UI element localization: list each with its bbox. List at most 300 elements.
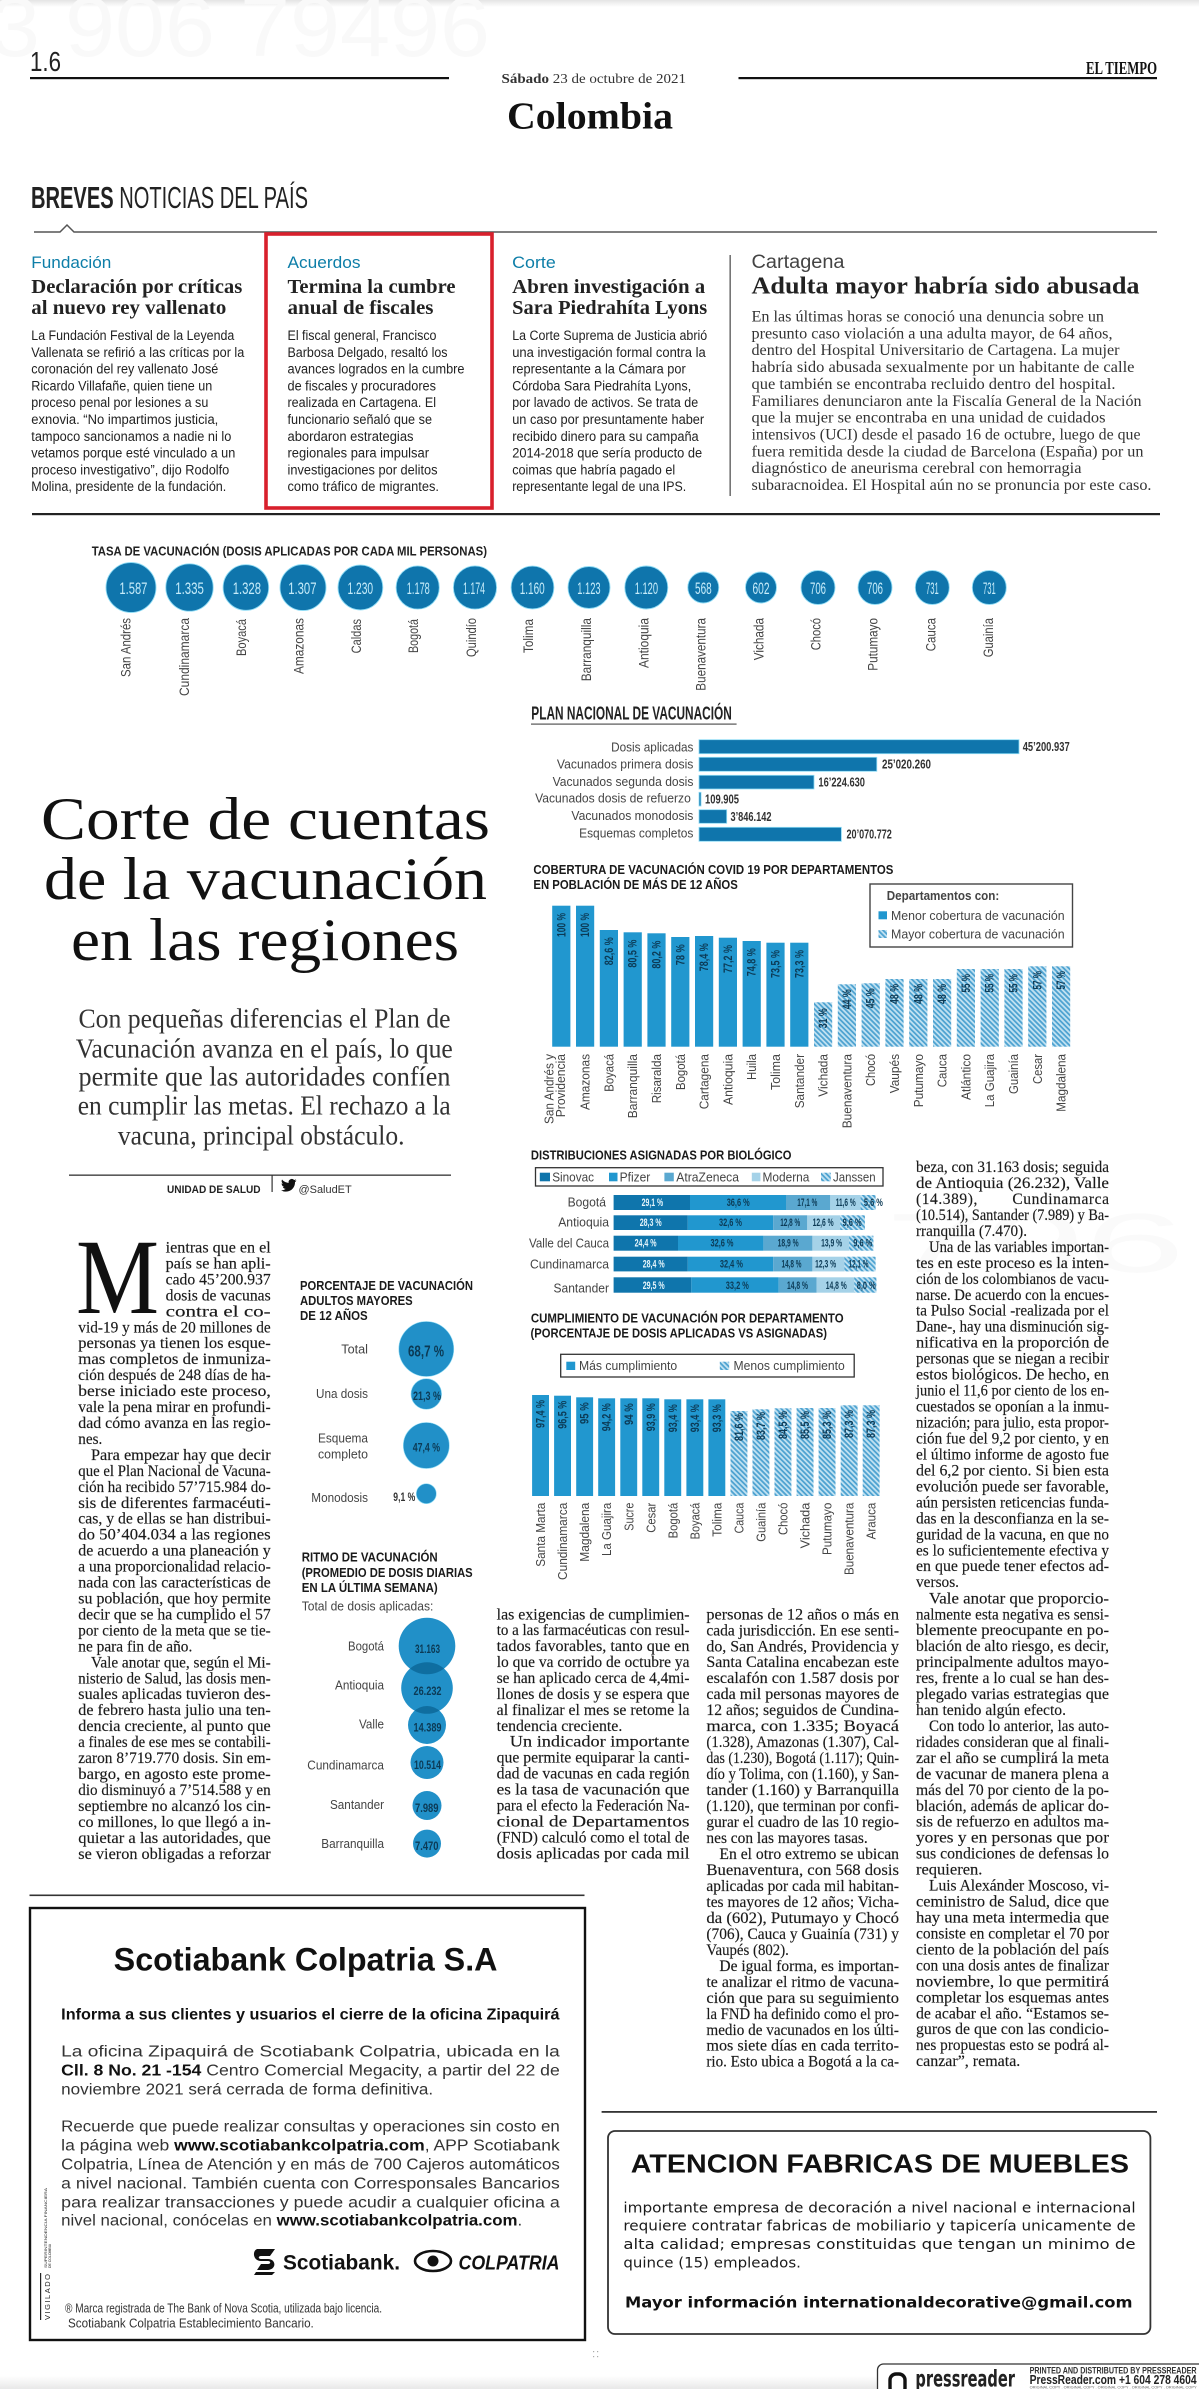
deck (76, 1004, 453, 1151)
legend: Menos cumplimiento (734, 1358, 845, 1373)
values: 31.163 (415, 1642, 440, 1656)
article column 4: aún persisten reticencias funda- (916, 1494, 1109, 1511)
bar labels: Esquemas completos (579, 825, 694, 840)
article column 3: escalafón con 1.587 dosis por (706, 1670, 900, 1687)
brief: Fundación: vetamos porque esté vinculado a un (31, 446, 235, 461)
bar labels: Vacunados segunda dosis (553, 774, 694, 789)
article column 4: de acabar el año. “Estamos se- (916, 2005, 1109, 2022)
brief: Cartagena: que la mujer se encontraba en una unidad de cuidados (752, 410, 1106, 427)
department labels: Arauca (864, 1502, 879, 1539)
bubble chart: porcentaje de vacunación: DE 12 AÑOS (300, 1308, 368, 1323)
brief: Fundación: La Fundación Festival de la Leyenda (31, 328, 235, 343)
segment values: 36,6 % (727, 1197, 750, 1209)
bubble values: 731 (926, 579, 939, 598)
ad paragraph 2: Colpatria, Línea de Atención y en más de 700 Cajeros automáticos (61, 2156, 560, 2173)
solid bars (532, 1395, 725, 1496)
brief: Cartagena: Cartagena (752, 252, 845, 273)
bubble chart: ritmo de vacunación: (PROMEDIO DE DOSIS DIARIAS (302, 1565, 473, 1580)
article column 2: que permite equiparar la canti- (497, 1750, 690, 1767)
advertisement: Scotiabank Colpatria (30, 1908, 585, 2340)
labels: Barranquilla (321, 1836, 385, 1851)
bubbles (106, 562, 1006, 612)
bubble chart: ritmo de vacunación: EN LA ÚLTIMA SEMANA) (302, 1580, 438, 1595)
newspaper logo: EL TIEMPO (1086, 58, 1157, 78)
ad body: requiere contratar fabricas de mobiliario y tapicería unicamente de (623, 2219, 1136, 2235)
solid bars (552, 906, 808, 1047)
article column 1: ne para fin de año. (78, 1638, 192, 1655)
article column 1: dio disminuyó a 7’514.588 y en (78, 1782, 271, 1799)
brief: Corte: Corte (512, 253, 556, 272)
article column 1: decir que se ha cumplido el 57 (78, 1606, 271, 1624)
segment values: 28,3 % (640, 1217, 662, 1229)
article column 4: narse. De acuerdo con la encues- (916, 1287, 1109, 1304)
bubble chart: tasa de vacunación: 731 (983, 579, 996, 598)
labels: Una dosis (316, 1386, 368, 1401)
bar labels: Dosis aplicadas (611, 740, 694, 755)
brief: Fundación: Vallenata se refirió a las críticas por la (31, 345, 245, 360)
article column 3: (1.328), Amazonas (1.307), Cal- (706, 1734, 899, 1751)
ad paragraph 2: para realizar transacciones y puede acudir a cualquier oficina a (61, 2194, 560, 2211)
ad body: importante empresa de decoración a nivel nacional e internacional (623, 2200, 1136, 2216)
brief: Cartagena: presunto caso violación a una adulta mayor, de 64 años, (752, 325, 1112, 342)
rotated department labels: Vichada (751, 618, 766, 660)
segment values: 24,4 % (635, 1238, 657, 1250)
article column 4: plegado varias estrategias que (916, 1686, 1109, 1703)
article column 4: requieren. (916, 1862, 982, 1879)
segment values: 11,6 % (836, 1197, 856, 1209)
article column 2: las exigencias de cumplimien- (497, 1606, 690, 1623)
legend: AtraZeneca (676, 1169, 740, 1184)
article column 4: cuestados se oponían a la inmu- (916, 1399, 1109, 1416)
horizontal bars (699, 740, 1019, 841)
ad paragraph 2: Recuerde que puede realizar consultas y operaciones sin costo en (61, 2119, 560, 2136)
brief: Corte: una investigación formal contra la (512, 345, 706, 360)
department labels: Vichada (816, 1053, 831, 1097)
article column 4: sis de refuerzo en adultos ma- (916, 1814, 1109, 1831)
article column 1: septiembre no alcanzó los cin- (78, 1798, 271, 1815)
article column 3: En el otro extremo se ubican (719, 1846, 899, 1863)
ad paragraph 2: la página web www.scotiabankcolpatria.com , APP Scotiabank (61, 2138, 560, 2155)
bubble values: 1.587 (119, 579, 147, 598)
article column 1: ción ha recibido 57’715.984 do- (78, 1479, 271, 1496)
article column 3: do, San Andrés, Providencia y (706, 1638, 899, 1655)
labels (311, 1342, 369, 1505)
brief: Acuerdos: Barbosa Delgado, resaltó los (288, 345, 448, 360)
bar values: 57 % (1054, 971, 1068, 990)
bar values: 93,3 % (710, 1404, 724, 1432)
department labels: Tolima (709, 1502, 724, 1537)
labels: Cundinamarca (307, 1758, 385, 1772)
article column 1: su población, que hoy permite (78, 1590, 271, 1608)
article column 4: guridad de la vacuna, en que no (916, 1526, 1109, 1543)
article column 2 (497, 1606, 690, 1862)
bar values: 45 % (864, 988, 878, 1008)
bar values: 85,3 % (820, 1411, 834, 1439)
brief: Corte: un caso por presuntamente haber (512, 412, 705, 427)
article column 3: Santa Catalina encabezan este (706, 1654, 899, 1671)
article column 4: Dane-, hay una disminución sig- (916, 1319, 1109, 1336)
deck: Vacunación avanza en el país, lo que (76, 1034, 453, 1064)
row labels: Antioquia (558, 1215, 610, 1230)
segment values: 8,0 % (857, 1280, 876, 1292)
article column 1: nes. (78, 1431, 102, 1448)
department labels: Cauca (935, 1053, 950, 1087)
article column 3: 12 años; seguidos de Cundina- (706, 1702, 899, 1719)
labels: Santander (330, 1797, 385, 1812)
segment values: 18,9 % (778, 1238, 799, 1250)
bubble values: 1.178 (407, 579, 430, 598)
article column 1: se vieron obligadas a reforzar (78, 1846, 272, 1863)
article column 4: (14.389), Cundinamarca (916, 1191, 1109, 1208)
chart title: PORCENTAJE DE VACUNACIÓN (300, 1278, 473, 1293)
department labels: Buenaventura (842, 1502, 857, 1575)
bar values: 20’070.772 (846, 826, 892, 842)
article column 4: tes en este proceso es la inten- (916, 1255, 1109, 1272)
article column 4: del 6,2 por ciento. Si bien esta (916, 1462, 1109, 1479)
main headline: de la vacunación (44, 846, 487, 912)
row labels: Valle del Cauca (529, 1235, 610, 1250)
department labels: Vaupés (887, 1054, 902, 1093)
brief: Fundación: Molina, presidente de la fundación. (31, 479, 226, 494)
article column 2: tados favorables, tanto que en (497, 1638, 690, 1655)
department labels: Vichada (798, 1502, 813, 1548)
bar values: 87,3 % (842, 1410, 856, 1438)
article column 4: han tenido algún efecto. (916, 1702, 1066, 1719)
article column 4: beza, con 31.163 dosis; seguida (916, 1159, 1109, 1176)
segment values: 17,1 % (797, 1197, 817, 1209)
article column 4: personas que se niegan a recibir (916, 1351, 1110, 1368)
article column 4: completar los esquemas antes (916, 1989, 1109, 2006)
article column 1: personas ya tienen los esque- (78, 1335, 271, 1352)
values: 21,3 % (413, 1389, 441, 1403)
article column 4: sus condiciones de defensas lo (916, 1846, 1109, 1863)
department labels: Cauca (732, 1502, 746, 1533)
bar values: 45’200.937 (1023, 739, 1070, 754)
legend: Janssen (833, 1169, 876, 1184)
bar values: 73,3 % (792, 950, 806, 978)
article column 4: principalmente adultos mayo- (916, 1654, 1109, 1671)
article column 3: la FND ha definido como el pro- (706, 2006, 899, 2023)
article column 1: Vale anotar que, según el Mi- (91, 1654, 271, 1671)
bar values: 81,6 % (732, 1413, 746, 1441)
segment values: 32,6 % (710, 1238, 734, 1250)
department labels: Guainía (754, 1502, 768, 1542)
segment values: 32,6 % (719, 1217, 742, 1229)
vigilado mark: VIGILADO (43, 2274, 52, 2320)
legend (536, 1168, 883, 1186)
brief: Acuerdos: Termina la cumbre (288, 276, 456, 298)
article column 4: versos. (916, 1574, 959, 1591)
chart title: PLAN NACIONAL DE VACUNACIÓN (531, 702, 732, 723)
article column 1: mas completos de inmuniza- (78, 1351, 271, 1368)
values: 9,1 % (393, 1490, 416, 1504)
article column 1 (76, 1219, 272, 1863)
department labels: Guainía (1006, 1053, 1021, 1094)
article column 3: tander (1.160) y Barranquilla (706, 1782, 899, 1799)
brief: Acuerdos: avances logrados en la cumbre (288, 362, 464, 377)
bar values: 48 % (935, 984, 949, 1004)
brief: Fundación (31, 253, 245, 494)
bar chart: plan nacional de vacunación (531, 702, 1070, 842)
article column 4: nalmente esta negativa es sensi- (916, 1606, 1109, 1623)
rotated department labels: Bogotá (406, 619, 421, 653)
brief: Cartagena: dentro del Hospital Universitario de Cartagena. La mujer (752, 342, 1120, 359)
department labels: Boyacá (601, 1053, 616, 1092)
article column 4: zar el año se cumplirá la meta (916, 1750, 1109, 1767)
bubbles (399, 1322, 454, 1504)
article column 2: cional de Departamentos (497, 1813, 690, 1830)
article column 1: suales aplicadas tuvieron des- (78, 1686, 271, 1703)
bar values: 80,5 % (626, 939, 640, 968)
bar values: 96,5 % (556, 1400, 570, 1429)
ad title: Scotiabank Colpatria S.A (114, 1942, 497, 1978)
article column 2: (FND) calculó como el total de (497, 1829, 690, 1846)
bubble values: 1.335 (175, 579, 204, 598)
bubble values: 602 (752, 579, 770, 598)
article column 1: zaron 8’719.770 dosis. Sin em- (78, 1750, 271, 1767)
article column 4: blemente preocupante en po- (916, 1622, 1109, 1639)
article column 4: Vale anotar que proporcio- (929, 1590, 1109, 1607)
article column 4: consiste en completar el 70 por (916, 1926, 1110, 1942)
article column 4: guros de que con las condicio- (916, 2021, 1109, 2038)
text: 796 (885, 1196, 1185, 1290)
article column 4 (915, 1159, 1110, 2070)
department labels: Buenaventura (839, 1053, 854, 1128)
ad paragraph 1: La oficina Zipaquirá de Scotiabank Colpatria, ubicada en la (61, 2044, 560, 2061)
bar values: 94,2 % (600, 1403, 614, 1431)
article column 2: para el efecto la Federación Na- (497, 1798, 690, 1814)
department labels: Cundinamarca (555, 1502, 570, 1580)
segment values (635, 1197, 883, 1292)
department labels: San Andrés y (542, 1054, 556, 1124)
department labels: Putumayo (820, 1503, 835, 1555)
bar values: 87,3 % (864, 1410, 878, 1438)
department labels: Boyacá (687, 1502, 702, 1539)
brief: Fundación: tampoco sancionamos a nadie ni lo (31, 429, 231, 444)
bubble chart: ritmo de vacunación (302, 1550, 473, 1858)
values: 10.514 (414, 1758, 441, 1772)
advertisement: Scotiabank Colpatria: COLPATRIA (458, 2252, 560, 2274)
striped bars (730, 1405, 880, 1496)
legend: Moderna (762, 1169, 810, 1184)
labels: Valle (359, 1717, 384, 1732)
brief: Acuerdos: abordaron estrategias (288, 429, 414, 444)
section title: Colombia (507, 96, 673, 138)
values: 7.470 (415, 1839, 439, 1853)
bar values: 78,4 % (697, 943, 711, 971)
article column 1: país se han apli- (166, 1256, 271, 1272)
article column 2: dosis aplicadas por cada mil (497, 1845, 690, 1862)
article column 4: en que puede tener efectos ad- (916, 1558, 1109, 1575)
article column 4: hay una meta intermedia que (916, 1910, 1109, 1926)
rotated department labels: Buenaventura (694, 618, 709, 691)
brief: Fundación: al nuevo rey vallenato (31, 297, 226, 319)
bar values: 97,4 % (534, 1400, 548, 1428)
article column 1: vid-19 y más de 20 millones de (78, 1319, 271, 1336)
article column 2: llones de dosis y se espera que (497, 1686, 690, 1703)
vigilado mark: SUPERINTENDENCIA FINANCIERA (44, 2187, 48, 2268)
article column 3: mos siete días en cada territo- (706, 2038, 899, 2055)
brief: Corte (512, 253, 707, 494)
article column 3: marca, con 1.335; Boyacá (706, 1718, 899, 1735)
brief: Acuerdos: Acuerdos (288, 253, 360, 272)
values (414, 1642, 442, 1853)
article column 1: berse iniciado este proceso, (78, 1383, 271, 1400)
bubble values: 706 (867, 579, 883, 598)
segment values: 32,4 % (720, 1259, 743, 1271)
ad subtitle: Informa a sus clientes y usuarios el cierre de la oficina Zipaquirá (61, 2006, 560, 2023)
bar values: 48 % (888, 984, 902, 1004)
department labels: Barranquilla (625, 1053, 640, 1118)
ad body: alta calidad; empresas constituidas que tengan un minimo de (623, 2237, 1136, 2253)
bubble values: 568 (695, 579, 712, 598)
breves heading: BREVES NOTICIAS DEL PAÍS (31, 180, 308, 215)
article column 1: do 50’404.034 a las regiones (78, 1527, 271, 1544)
bar values: 84,5 % (776, 1411, 790, 1439)
brief: Corte: representante legal de una IPS. (512, 479, 686, 494)
legend: Sinovac (552, 1169, 594, 1184)
brief: Acuerdos: como tráfico de migrantes. (288, 479, 439, 494)
article column 4: con una dosis antes de finalizar (916, 1957, 1110, 1974)
article column 2: tendencia creciente. (497, 1718, 622, 1735)
article column 4: noviembre, lo que permitirá (916, 1973, 1109, 1990)
labels: Bogotá (348, 1639, 385, 1654)
rotated department labels: Tolima (521, 619, 536, 653)
main headline: en las regiones (71, 907, 459, 973)
bar values: 93,9 % (644, 1403, 658, 1431)
department labels: Tolima (768, 1053, 783, 1090)
red highlight box (266, 234, 492, 508)
date: Sábado 23 de octubre de 2021 (502, 72, 686, 87)
vigilado mark (40, 2187, 52, 2320)
brief: Corte: La Corte Suprema de Justicia abrió (512, 328, 707, 343)
brief: Corte: Sara Piedrahíta Lyons (512, 297, 707, 319)
bar values: 80,2 % (650, 940, 664, 969)
legend (561, 1354, 854, 1377)
chart title: CUMPLIMIENTO DE VACUNACIÓN POR DEPARTAMENTO (531, 1310, 844, 1325)
legend (870, 884, 1072, 947)
department labels: Amazonas (578, 1054, 593, 1110)
bar values: 83,7 % (754, 1412, 768, 1440)
department labels: Risaralda (649, 1053, 664, 1103)
article column 3: rio. Esto ubica a Bogotá a la ca- (706, 2054, 899, 2071)
article column 4: estos biológicos. De hecho, en (916, 1367, 1109, 1384)
article column 2: se han aplicado cerca de 4,4mi- (497, 1670, 690, 1687)
byline: @SaludET (298, 1184, 352, 1196)
article column 4: Con todo lo anterior, las auto- (929, 1718, 1109, 1735)
brief: Cartagena: subaracnoidea. El Hospital aún no se pronuncia por este caso. (752, 477, 1152, 494)
brief: Corte: Abren investigación a (512, 276, 705, 298)
brief: Acuerdos: de fiscales y procuradores (288, 378, 436, 393)
department labels: Santander (792, 1053, 807, 1108)
department labels: Huila (744, 1053, 759, 1080)
department labels: La Guajira (982, 1053, 997, 1107)
bar values: 82,6 % (602, 937, 616, 965)
ad paragraph 1 (61, 2044, 560, 2098)
labels: completo (318, 1446, 368, 1462)
department labels: Antioquia (720, 1053, 735, 1105)
bar values: 109.905 (705, 792, 739, 806)
department labels: Providencia (553, 1053, 568, 1117)
segment values: 12,8 % (780, 1217, 800, 1229)
brief: Cartagena: En las últimas horas se conoció una denuncia sobre un (752, 308, 1104, 326)
bubble values: 1.230 (348, 579, 373, 598)
chart title: DISTRIBUCIONES ASIGNADAS POR BIOLÓGICO (531, 1147, 792, 1162)
article column 1: nada con las características de (78, 1575, 271, 1592)
article column 3: te analizar el ritmo de vacuna- (706, 1974, 899, 1991)
bar values: 44 % (840, 989, 854, 1009)
brief: Cartagena: que también se encontraba recluido dentro del hospital. (752, 376, 1116, 393)
brief: Cartagena: diagnóstico de aneurisma cerebral con hemorragia (752, 460, 1082, 477)
segment values: 33,2 % (726, 1280, 749, 1292)
article column 3: gurar el cuadro de las 10 regio- (706, 1814, 899, 1831)
article column 4: ceministro de Salud, dice que (916, 1894, 1109, 1910)
bar values: 57 % (1030, 971, 1044, 990)
bar values: 55 % (983, 974, 997, 992)
row labels: Bogotá (568, 1195, 607, 1210)
bar values: 100 % (554, 913, 568, 937)
bar values: 31 % (816, 1008, 830, 1028)
ad paragraph 2: nivel nacional, conócelas en www.scotiabankcolpatria.com . (61, 2213, 522, 2230)
main headline (41, 786, 490, 973)
deck: vacuna, principal obstáculo. (118, 1121, 405, 1151)
bar labels (535, 740, 694, 840)
department labels: Atlántico (958, 1054, 973, 1100)
article column 3: (1.120), que terminan por confi- (706, 1798, 899, 1815)
brief: Cartagena: Familiares denunciaron ante la Fiscalía General de la Nación (752, 393, 1142, 410)
department labels: Magdalena (577, 1502, 592, 1562)
article column 3: medio de vacunados en los últi- (706, 2022, 899, 2039)
article column 4: ridades consideran que al finali- (916, 1734, 1109, 1751)
chart title: RITMO DE VACUNACIÓN (302, 1550, 438, 1565)
article column 4: das en la desconfianza en la se- (916, 1510, 1109, 1527)
article column 1: dosis de vacunas (166, 1287, 271, 1304)
department labels: Chocó (863, 1054, 878, 1086)
brief: Cartagena: intensivos (UCI) desde el pasado 16 de octubre, luego de que (752, 426, 1141, 444)
segment values: 12,3 % (815, 1259, 836, 1271)
brief: Corte: Córdoba Sara Piedrahíta Lyons, (512, 378, 691, 393)
segment values: 12,1 % (848, 1259, 869, 1271)
brief: Acuerdos: El fiscal general, Francisco (288, 328, 436, 343)
segment values: 29,5 % (643, 1280, 665, 1292)
article column 1: cas, y de ellas se han distribui- (78, 1511, 271, 1528)
ad paragraph 2: a nivel nacional. También cuenta con Corresponsales Bancarios (61, 2175, 560, 2192)
article column 1: por ciento de la meta que se tie- (78, 1622, 271, 1639)
values: 14.389 (414, 1721, 442, 1735)
brief: Corte: representante a la Cámara por (512, 362, 686, 377)
values: 7.989 (415, 1801, 439, 1815)
byline (69, 1174, 451, 1196)
article column 4: Una de las variables importan- (929, 1239, 1109, 1256)
bubble values: 1.307 (288, 579, 316, 598)
department labels: Santa Marta (533, 1502, 548, 1567)
bar labels: Vacunados primera dosis (557, 756, 694, 771)
article column 4: blación, además de aplicar do- (916, 1798, 1109, 1815)
bar values: 3’846.142 (730, 809, 772, 824)
bar labels: Vacunados dosis de refuerzo (535, 791, 691, 806)
rotated department labels: Cauca (924, 618, 939, 651)
article column 4: ción fue del 9,2 por ciento, y en (916, 1430, 1109, 1448)
article column 1: nisterio de Salud, las dosis men- (78, 1670, 271, 1687)
pressreader footer badge (878, 2364, 1199, 2389)
brief: Fundación: proceso investigativo”, dijo Rodolfo (31, 462, 229, 477)
bubble values: 1.160 (520, 579, 545, 598)
bar values: 78 % (673, 944, 687, 965)
row labels: Santander (554, 1281, 610, 1296)
article column 4: nificativa en la proporción de (916, 1335, 1109, 1352)
brief: Acuerdos (288, 253, 464, 494)
article column 1: bargo, en agosto este prome- (78, 1766, 271, 1783)
